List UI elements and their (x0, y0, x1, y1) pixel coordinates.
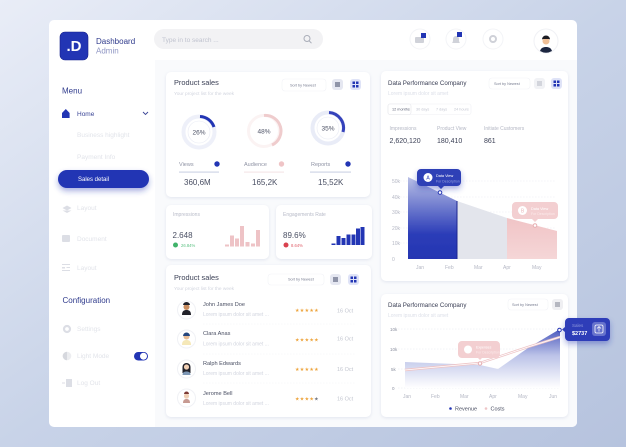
brand name: Dashboard (96, 37, 135, 46)
row: Ralph Edwards: Lorem ipsum dolor sit amet ... (203, 371, 269, 377)
sort dropdown: Sort by Newest (290, 84, 317, 88)
view buttons (330, 274, 359, 285)
stats: Impressions (390, 126, 417, 132)
menu items muted: Layout (77, 205, 97, 212)
row: Ralph Edwards (178, 360, 354, 378)
donut: audience (248, 115, 281, 146)
submenu text: Payment Info (77, 154, 116, 161)
tooltip: expense: Expenses (476, 346, 492, 350)
toggle (134, 352, 148, 360)
sort dropdown (508, 299, 548, 310)
axis labels: May (532, 265, 542, 271)
tooltip B: B (521, 208, 525, 214)
sidebar menu (58, 86, 149, 387)
row: Ralph Edwards: 16 Oct (337, 367, 354, 373)
line chart (390, 327, 561, 400)
heading: menu: Menu (62, 86, 82, 96)
dashboard panel (49, 20, 577, 427)
panel: data performance line chart: Lorem ipsum dolor sit amet (388, 313, 449, 319)
axis labels: 40k (392, 195, 401, 201)
time range tabs: 12 months (392, 108, 410, 112)
row: Jerome Bell (178, 389, 354, 407)
panel: product sales list (166, 265, 371, 417)
line chart: Jan (403, 394, 411, 400)
row: Jerome Bell: ★★★★★ (295, 396, 319, 402)
line chart: Feb (431, 394, 440, 400)
heading: Data Performance Company (388, 302, 467, 309)
brand name: Admin (96, 46, 119, 56)
sort dropdown: Sort by Newest (512, 303, 539, 307)
stats: 180,410 (437, 138, 462, 145)
trend up: 26.84% (181, 243, 195, 248)
menu items muted (62, 205, 107, 272)
tooltip B: For Description (531, 212, 555, 216)
tooltip: sales value: Sales (572, 323, 584, 328)
panel: product sales donuts (166, 72, 370, 197)
stat: audience: 165,2K (252, 178, 278, 187)
axis labels: 5k (391, 367, 397, 372)
tooltip A: A (426, 176, 430, 182)
tooltip A: Data View (436, 174, 453, 178)
trend down: 8.64% (291, 243, 303, 248)
panel: impressions: Impressions (173, 212, 200, 218)
donut: reports (312, 112, 344, 144)
logo (60, 32, 88, 60)
icon: gear (483, 29, 503, 49)
axis labels: 0 (392, 386, 395, 391)
bar chart: engagements (332, 227, 364, 245)
row: Ralph Edwards: Ralph Edwards (203, 361, 241, 367)
axis labels (390, 327, 398, 391)
legend: Revenue (455, 406, 477, 412)
row: Clara Anas: Lorem ipsum dolor sit amet ... (203, 342, 269, 348)
stat: views: 360,6M (184, 178, 211, 187)
legend: Costs (490, 406, 505, 412)
tooltip B: Data View (531, 207, 548, 211)
line chart: May (518, 394, 528, 400)
time range tabs: 30 days (416, 108, 429, 112)
stats: 2,620,120 (390, 138, 421, 145)
row: John James Doe: Lorem ipsum dolor sit amet ... (203, 312, 269, 318)
tooltip: sales value: $2737 (572, 331, 587, 337)
axis labels: Jan (416, 265, 424, 271)
logo: .D (66, 38, 82, 55)
stat: views: Views (179, 162, 194, 168)
row: Jerome Bell: Jerome Bell (203, 391, 233, 397)
config items: Light Mode (77, 353, 110, 360)
tooltip: expense (458, 341, 500, 365)
heading: Data Performance Company (388, 80, 467, 87)
stats (390, 126, 525, 145)
time range tabs (388, 104, 471, 114)
stats: Initiate Customers (484, 126, 525, 132)
row: John James Doe (178, 301, 354, 319)
donut: reports: 35% (321, 126, 335, 132)
time range tabs: 7 days (436, 108, 447, 112)
axis labels: 10k (392, 241, 401, 247)
sort dropdown: Sort by Newest (288, 278, 315, 282)
axis labels: 50k (392, 179, 401, 185)
sort dropdown (282, 79, 326, 91)
panel: engagements rate: Engagements Rate (283, 212, 326, 218)
sort dropdown (489, 78, 530, 89)
panel: data performance area chart: Lorem ipsum dolor sit amet (388, 91, 449, 97)
config items: Settings (77, 326, 101, 333)
view button (552, 299, 563, 310)
axis labels: 20k (392, 226, 401, 232)
sort dropdown (268, 274, 324, 285)
donut: audience: 48% (257, 128, 271, 136)
tooltip: sales value (562, 318, 610, 341)
user avatar (534, 29, 558, 53)
axis labels: 0 (392, 257, 395, 263)
donut: views (184, 116, 214, 148)
search bar: Type in to search ... (162, 37, 219, 44)
search bar (154, 29, 323, 49)
row: Clara Anas: 16 Oct (337, 336, 354, 342)
panel: data performance area chart (381, 71, 568, 281)
menu item: home: Home (77, 111, 95, 118)
panel: engagements rate (276, 205, 372, 259)
button: sales detail: Sales detail (78, 177, 109, 183)
row: John James Doe: 16 Oct (337, 308, 354, 314)
button: sales detail (58, 170, 149, 188)
stat: views (179, 161, 220, 187)
heading: Product sales (174, 78, 219, 87)
axis labels: Apr (503, 265, 511, 271)
stat: audience (244, 161, 284, 187)
view buttons (332, 79, 361, 90)
area chart (392, 169, 558, 271)
axis labels (392, 179, 542, 271)
line chart: Apr (489, 394, 497, 400)
stat: reports: 15,52K (318, 178, 344, 187)
panel: impressions (166, 205, 269, 259)
legend (449, 406, 505, 412)
panel: impressions: 2.648 (172, 231, 193, 240)
stats: Product View (437, 126, 467, 132)
stats: 861 (484, 138, 496, 145)
panel: product sales donuts: Your project list for the week (174, 91, 235, 97)
sort dropdown: Sort by Newest (494, 82, 521, 86)
menu items muted: Document (77, 236, 107, 243)
row: Clara Anas (178, 330, 354, 348)
row: Ralph Edwards: ★★★★★ (295, 367, 319, 373)
line chart: Jun (549, 394, 557, 400)
panel: data performance line chart (381, 294, 568, 417)
stat: reports: Reports (311, 162, 331, 168)
tooltip A (417, 169, 461, 194)
config items (62, 326, 110, 387)
axis labels: 10k (390, 347, 398, 352)
row: John James Doe: John James Doe (203, 302, 245, 308)
axis labels: 10k (390, 327, 398, 332)
stat: reports (310, 161, 351, 187)
row: Clara Anas: Clara Anas (203, 331, 231, 337)
tooltip B (512, 202, 558, 227)
time range tabs: 24 hours (454, 108, 469, 112)
axis labels: Feb (445, 265, 454, 271)
tooltip: expense: For Description (476, 350, 500, 354)
submenu text (77, 132, 130, 161)
axis labels: Mar (474, 265, 483, 271)
line chart: Mar (460, 394, 469, 400)
config items: Log Out (77, 380, 100, 387)
tooltip A: For Description (436, 180, 460, 184)
row: Jerome Bell: Lorem ipsum dolor sit amet ... (203, 401, 269, 407)
axis labels: 30k (392, 210, 401, 216)
brand name (96, 37, 135, 56)
heading: configuration: Configuration (62, 296, 110, 305)
view buttons (534, 78, 562, 89)
row: John James Doe: ★★★★★ (295, 308, 319, 314)
row: Jerome Bell: 16 Oct (337, 396, 354, 402)
icon: mail (410, 29, 430, 49)
row: Clara Anas: ★★★★★ (295, 338, 319, 344)
donut: views: 26% (192, 130, 206, 136)
stat: audience: Audience (244, 162, 267, 168)
panel: engagements rate: 89.6% (283, 231, 306, 240)
heading: Product sales (174, 273, 219, 282)
panel: product sales list: Your project list for the week (174, 286, 235, 292)
icon: bell (446, 29, 466, 49)
menu item: home (62, 109, 148, 118)
menu items muted: Layout (77, 265, 97, 272)
submenu text: Business highlight (77, 132, 130, 139)
bar chart: impressions (225, 226, 260, 246)
